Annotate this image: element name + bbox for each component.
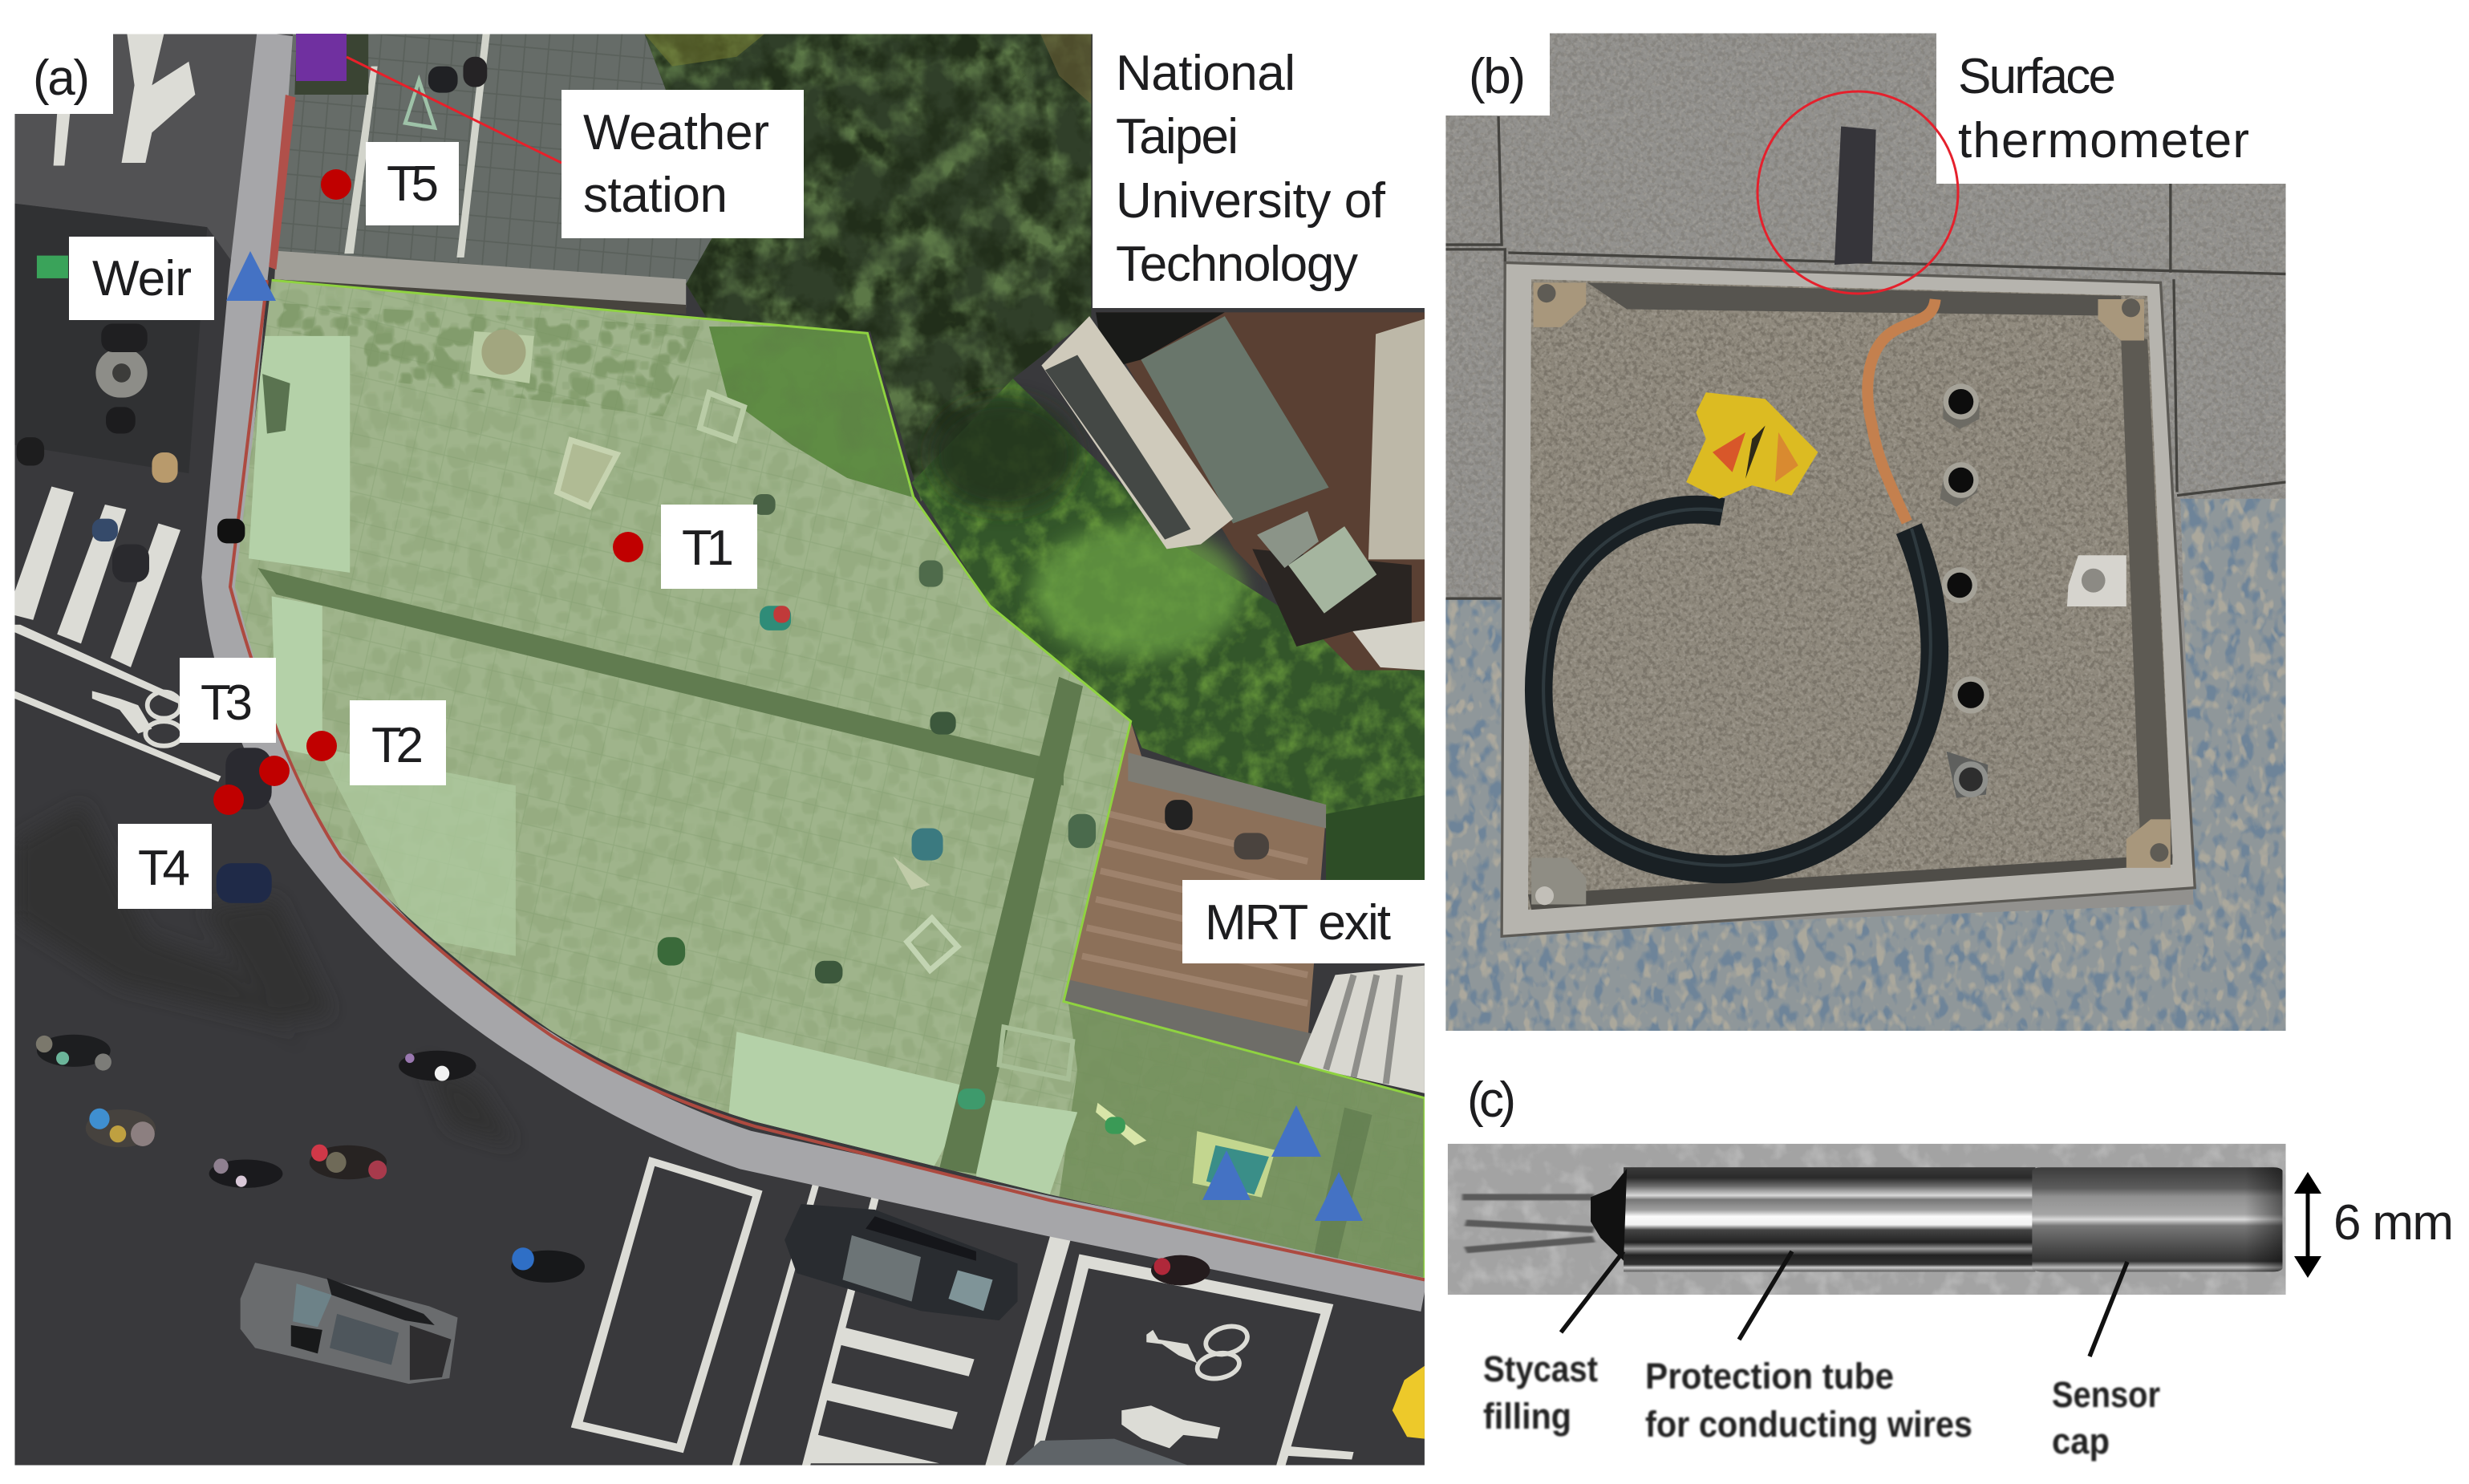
- label box: weather station: station: [583, 168, 728, 223]
- gray car: [241, 1263, 458, 1384]
- label box: (b): [1445, 33, 1550, 116]
- trees: [645, 34, 1091, 501]
- label box: (a): [14, 34, 113, 114]
- label box: National Taipei University of Technology: University of: [1116, 173, 1386, 229]
- label box: T2: [350, 700, 446, 785]
- label box: (a): (a): [33, 51, 90, 106]
- yellow vehicle: [1393, 1366, 1425, 1439]
- panel: (c) sensor photo: [1448, 1072, 2454, 1462]
- label box: weather station: Weather: [583, 105, 769, 160]
- bike lane wheel symbols: [145, 692, 1251, 1382]
- label box: T5: [366, 142, 459, 225]
- weather station leader line: [347, 57, 562, 163]
- label box: T4: T4: [138, 841, 190, 896]
- label box: T4: [118, 824, 212, 909]
- MRT exit stairs: [1064, 721, 1425, 1093]
- metal box frame: [1502, 262, 2195, 936]
- road markings: [14, 34, 1354, 1466]
- panel: (b) surface thermometer photo: [1445, 24, 2289, 1031]
- surface thermometer slot: [1835, 127, 1876, 265]
- label box: MRT exit: MRT exit: [1205, 895, 1391, 951]
- black car: [784, 1204, 1188, 1466]
- label box: T3: [180, 658, 276, 743]
- sidewalk curb: [221, 34, 1425, 1292]
- label: 6 mm: 6 mm: [2333, 1195, 2454, 1251]
- label box: National Taipei University of Technology: National: [1116, 46, 1295, 101]
- protection tube: [1624, 1167, 2035, 1271]
- leader lines: [1561, 1251, 2127, 1356]
- temperature sensor points T1 to T5: [213, 169, 643, 815]
- label box: T2: T2: [371, 718, 424, 773]
- right foliage: [912, 379, 1425, 880]
- label box: surface thermometer: Surface: [1958, 49, 2116, 104]
- concrete pavers and aggregate ground: [1445, 33, 2286, 1031]
- label: Stycast filling: [1483, 1348, 1598, 1437]
- upper pavement near T5: [269, 34, 718, 314]
- label box: National Taipei University of Technology: Taipei: [1116, 109, 1239, 164]
- label: Sensor cap: [2052, 1374, 2160, 1462]
- sensor photograph: [1448, 1144, 2286, 1295]
- corner plates: [1531, 282, 2171, 905]
- label box: (b): (b): [1469, 49, 1526, 104]
- label: Sensor cap: Sensor: [2052, 1374, 2160, 1415]
- road surface: [14, 34, 1425, 1466]
- box interior: [1528, 279, 2172, 910]
- black cable: [1539, 509, 1935, 870]
- label box: MRT exit: [1182, 880, 1425, 963]
- label box: Weir: [69, 237, 214, 320]
- weather station marker: [296, 34, 347, 81]
- copper wire: [1867, 299, 1936, 522]
- label: Stycast filling: Stycast: [1483, 1348, 1598, 1389]
- building roof: [1041, 312, 1425, 670]
- sensor cap: [2032, 1167, 2282, 1271]
- green highlighted plaza: [230, 274, 1427, 1287]
- panel: (a) aerial photo of the site: [14, 0, 1427, 1466]
- label box: weather station: [562, 90, 804, 238]
- yellow tape: [1686, 392, 1818, 499]
- label: Stycast filling: filling: [1483, 1396, 1571, 1437]
- label box: surface thermometer: [1936, 24, 2289, 184]
- label: Protection tube for conducting wires: for conducting wires: [1645, 1404, 1972, 1445]
- red circle around the thermometer: [1757, 91, 1958, 294]
- label box: T1: T1: [682, 521, 734, 576]
- label: Sensor cap: cap: [2052, 1421, 2110, 1462]
- conduit tubes: [1940, 383, 1989, 798]
- label: Protection tube for conducting wires: [1645, 1356, 1972, 1445]
- label box: National Taipei University of Technology: [1093, 0, 1425, 308]
- label: (c): (c): [1467, 1072, 1516, 1128]
- people and motorbikes on the road: [17, 324, 1210, 1285]
- label box: surface thermometer: thermometer: [1958, 113, 2249, 168]
- red curb line: [230, 280, 1425, 1279]
- label box: T1: [661, 505, 757, 589]
- label box: National Taipei University of Technology: Technology: [1116, 237, 1358, 292]
- label box: T5: T5: [387, 156, 439, 212]
- wires: [1462, 1197, 1594, 1250]
- label box: T3: T3: [201, 675, 253, 731]
- filling: [1591, 1169, 1627, 1261]
- weir triangle markers: [226, 251, 1363, 1221]
- dimension arrow: 6 mm: [2294, 1172, 2321, 1278]
- pedestrians on the plaza: [262, 374, 1275, 1198]
- label box: Weir: Weir: [92, 251, 192, 306]
- label: Protection tube for conducting wires: Protection tube: [1645, 1356, 1894, 1397]
